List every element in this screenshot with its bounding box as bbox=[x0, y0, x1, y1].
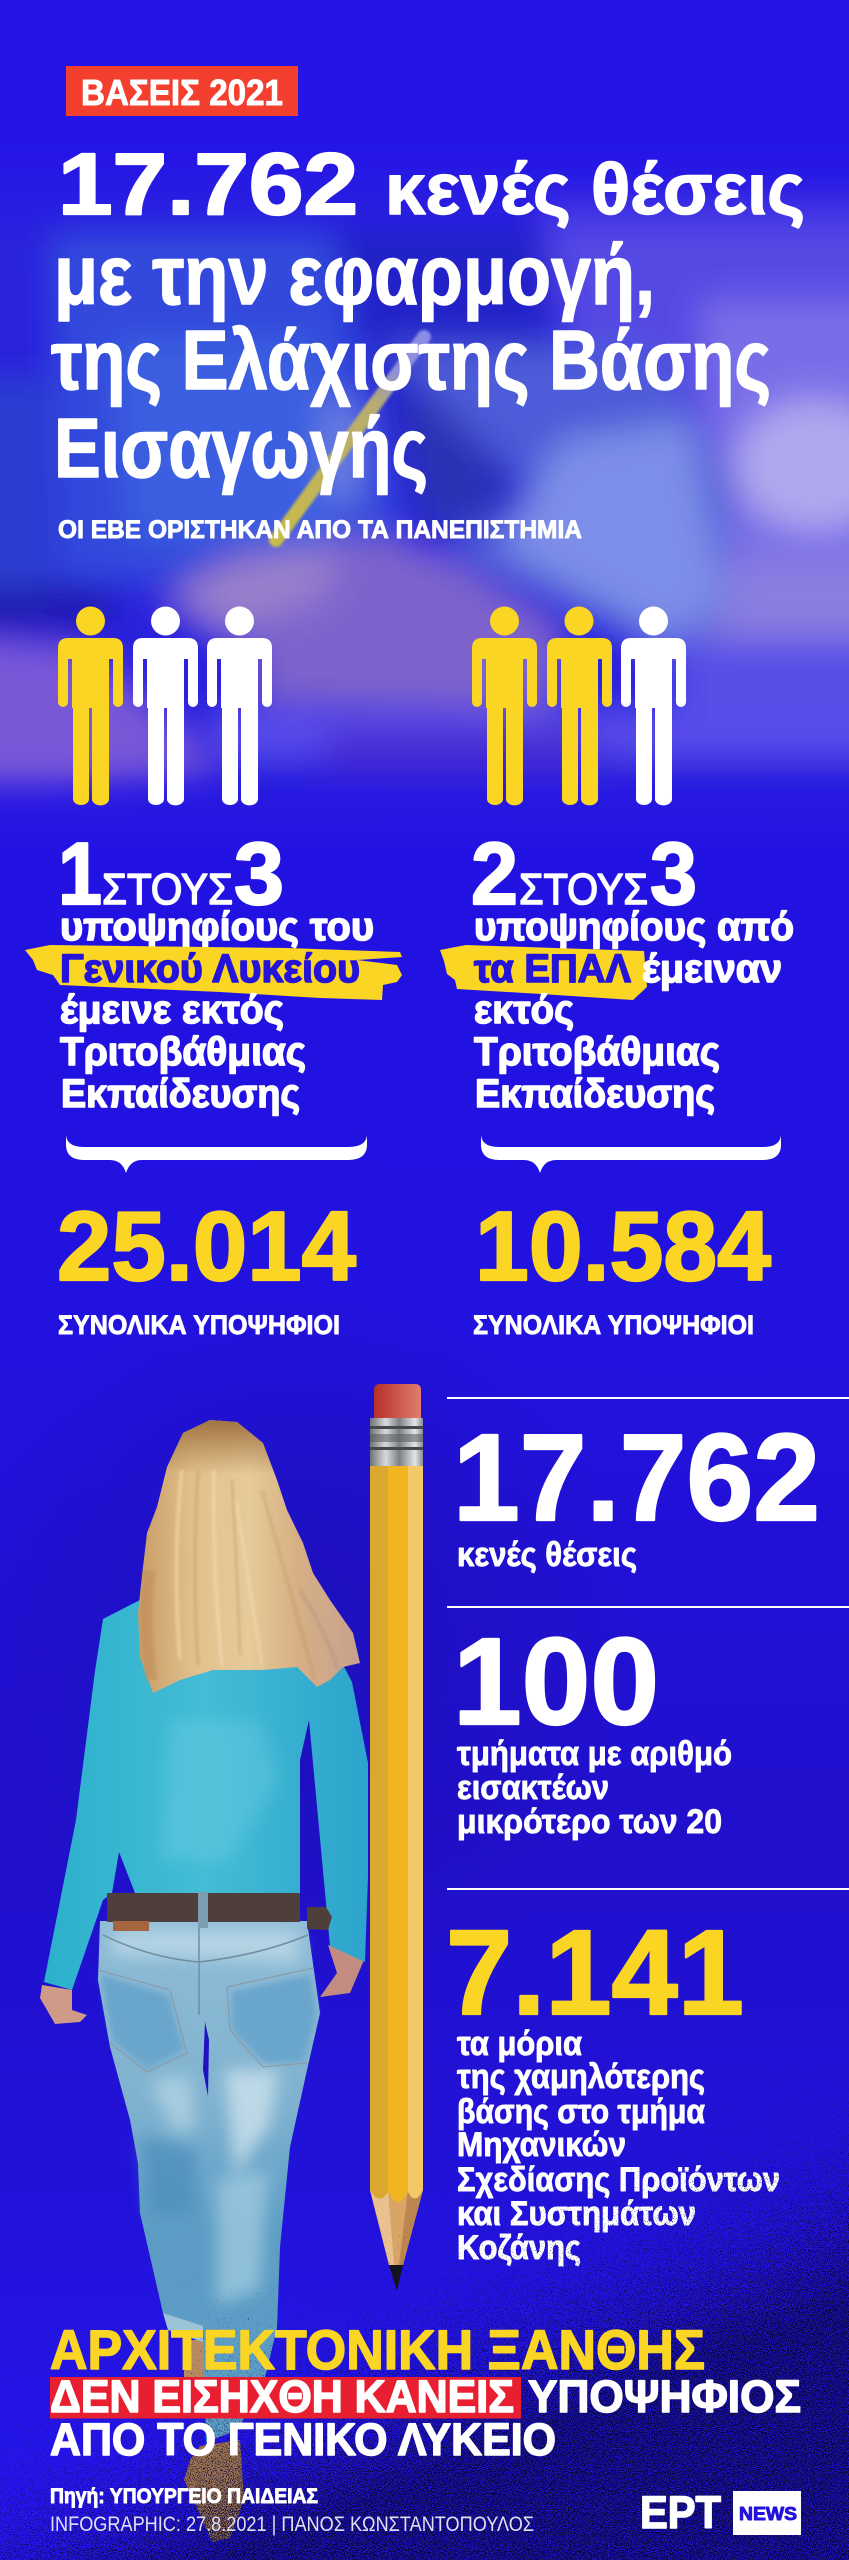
label left: ΣΥΝΟΛΙΚΑ ΥΠΟΨΗΦΙΟΙ bbox=[58, 1310, 340, 1340]
shoe bbox=[184, 2440, 244, 2542]
gap between legs bbox=[203, 2022, 209, 2096]
left column: 1 in 3 statement: 3 bbox=[234, 824, 284, 923]
stat: 7.141 lowest base: τα μόρια bbox=[457, 2025, 582, 2063]
right column: 2 in 3 statement: υποψηφίους από bbox=[474, 905, 794, 949]
jeans bbox=[98, 1921, 320, 2442]
label right: ΣΥΝΟΛΙΚΑ ΥΠΟΨΗΦΙΟΙ bbox=[473, 1310, 754, 1340]
subtitle: ΟΙ ΕΒΕ ΟΡΙΣΤΗΚΑΝ ΑΠΟ ΤΑ ΠΑΝΕΠΙΣΤΗΜΙΑ bbox=[58, 516, 582, 544]
lead bbox=[389, 2265, 403, 2291]
stat: 17.762 empty seats: κενές θέσεις bbox=[457, 1536, 637, 1574]
stat: 7.141 lowest base: 7.141 bbox=[446, 1904, 744, 2040]
right column: 2 in 3 statement: ΣΤΟΥΣ bbox=[519, 865, 648, 914]
logo: ΕΡΤ NEWS: NEWS bbox=[739, 2504, 797, 2524]
stat: 17.762 empty seats: 17.762 bbox=[453, 1410, 820, 1547]
right column: 2 in 3 statement: 3 bbox=[650, 824, 697, 923]
stat: 100 departments: 100 bbox=[453, 1614, 659, 1751]
pictogram: 2 of 3 people bbox=[472, 606, 686, 805]
source: Πηγή: ΥΠΟΥΡΓΕΙΟ ΠΑΙΔΕΙΑΣ bbox=[50, 2485, 318, 2508]
title: κενές θέσεις bbox=[385, 150, 805, 230]
red highlight bbox=[50, 2377, 521, 2418]
left column: 1 in 3 statement: έμεινε εκτός bbox=[60, 988, 284, 1032]
title: 17.762 bbox=[58, 136, 358, 233]
stat: 7.141 lowest base bbox=[446, 1904, 780, 2267]
pencil bbox=[370, 1384, 423, 2291]
left column: 1 in 3 statement: ΣΤΟΥΣ bbox=[102, 865, 233, 914]
right column: 2 in 3 statement: εκτός bbox=[474, 988, 574, 1032]
stat: 100 departments bbox=[453, 1614, 732, 1841]
right column: 2 in 3 statement: Εκπαίδευσης bbox=[475, 1072, 715, 1116]
right column: 2 in 3 statement: τα ΕΠΑΛ bbox=[474, 947, 631, 991]
title bbox=[51, 136, 805, 495]
left column: 1 in 3 statement: υποψηφίους του bbox=[60, 905, 374, 949]
total right: 10.584: 10.584 bbox=[475, 1191, 771, 1301]
brace left bbox=[66, 1135, 367, 1173]
stat: 7.141 lowest base: Κοζάνης bbox=[457, 2229, 581, 2267]
stat: 100 departments: μικρότερο των 20 bbox=[457, 1803, 722, 1841]
brace right bbox=[481, 1135, 781, 1173]
stat: 7.141 lowest base: της χαμηλότερης bbox=[457, 2058, 705, 2096]
stat: 7.141 lowest base: βάσης στο τμήμα bbox=[457, 2093, 705, 2131]
body bbox=[370, 1466, 388, 2199]
closing headline bbox=[50, 2318, 801, 2465]
eraser bbox=[374, 1384, 421, 1418]
left column: 1 in 3 statement: Τριτοβάθμιας bbox=[60, 1030, 306, 1074]
ferrule bbox=[370, 1418, 423, 1466]
right column: 2 in 3 statement bbox=[440, 824, 794, 1116]
hair bbox=[138, 1420, 360, 1693]
title: Εισαγωγής bbox=[54, 401, 428, 495]
title: με την εφαρμογή, bbox=[54, 228, 655, 322]
belt bbox=[107, 1893, 332, 1930]
closing headline: ΥΠΟΨΗΦΙΟΣ bbox=[528, 2371, 801, 2422]
figure: girl seen from behind bbox=[40, 1420, 368, 2542]
stat: 100 departments: εισακτέων bbox=[457, 1769, 609, 1807]
highlight: brush stroke bbox=[440, 945, 647, 1000]
closing headline: ΑΡΧΙΤΕΚΤΟΝΙΚΗ ΞΑΝΘΗΣ bbox=[50, 2318, 705, 2381]
highlight: brush stroke bbox=[25, 945, 402, 1000]
pockets bbox=[101, 1975, 183, 2068]
right hand bbox=[320, 1945, 364, 1997]
ankle bbox=[184, 2340, 208, 2388]
stat: 100 departments: τμήματα με αριθμό bbox=[457, 1735, 732, 1773]
pencil in photo bbox=[276, 337, 424, 540]
right column: 2 in 3 statement: Τριτοβάθμιας bbox=[474, 1030, 720, 1074]
closing headline: ΑΠΟ ΤΟ ΓΕΝΙΚΟ ΛΥΚΕΙΟ bbox=[50, 2414, 556, 2465]
divider lines bbox=[447, 1397, 849, 1890]
jeans cuff bbox=[163, 2313, 203, 2342]
right column: 2 in 3 statement: έμειναν bbox=[642, 947, 782, 991]
left column: 1 in 3 statement: Εκπαίδευσης bbox=[61, 1072, 300, 1116]
credit: INFOGRAPHIC: 27.8.2021 | ΠΑΝΟΣ ΚΩΝΣΤΑΝΤΟΠΟΥΛΟΣ bbox=[50, 2513, 534, 2536]
wood tip bbox=[370, 2190, 423, 2265]
sweater bbox=[44, 1600, 368, 1990]
closing headline: ΔΕΝ ΕΙΣΗΧΘΗ ΚΑΝΕΙΣ bbox=[50, 2371, 514, 2422]
background photo: hand writing with a pencil bbox=[0, 181, 849, 808]
stat: 7.141 lowest base: και Συστημάτων bbox=[457, 2195, 696, 2233]
speckled texture at the bottom bbox=[0, 1980, 849, 2560]
left hand bbox=[40, 1985, 87, 2024]
logo: ΕΡΤ NEWS bbox=[640, 2487, 801, 2538]
badge: ΒΑΣΕΙΣ 2021: ΒΑΣΕΙΣ 2021 bbox=[81, 72, 283, 113]
total left: 25.014: 25.014 bbox=[57, 1191, 356, 1301]
left column: 1 in 3 statement: Γενικού Λυκείου bbox=[60, 947, 360, 991]
pictogram: 1 of 3 people bbox=[58, 606, 272, 805]
stat: 7.141 lowest base: Σχεδίασης Προϊόντων bbox=[457, 2161, 780, 2199]
right column: 2 in 3 statement: 2 bbox=[471, 824, 518, 923]
left column: 1 in 3 statement: 1 bbox=[58, 824, 102, 923]
left column: 1 in 3 statement bbox=[25, 824, 402, 1116]
logo: ΕΡΤ NEWS: ΕΡΤ bbox=[640, 2487, 721, 2538]
stat: 7.141 lowest base: Μηχανικών bbox=[457, 2126, 626, 2164]
